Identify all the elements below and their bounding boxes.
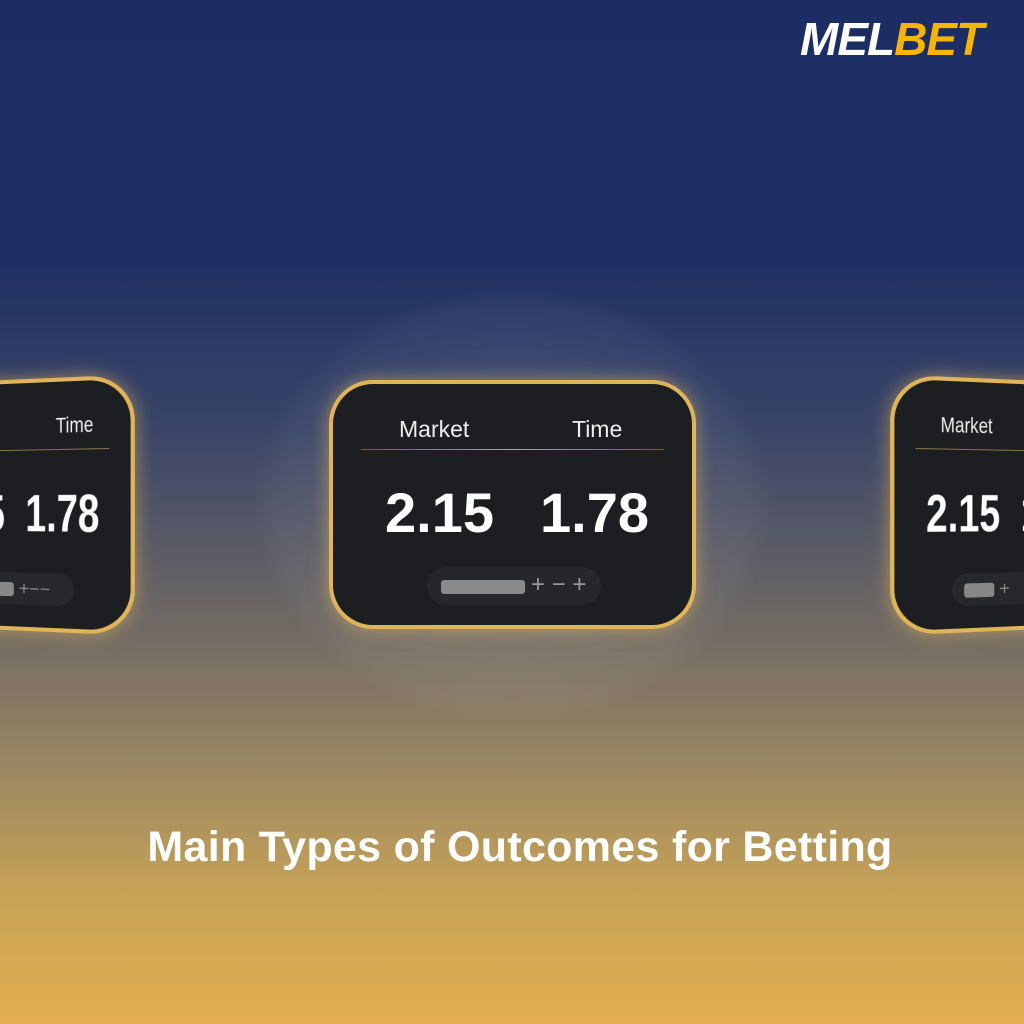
left card <box>0 374 135 636</box>
right card: + <box>999 578 1010 599</box>
center card: 1.78 <box>540 481 649 544</box>
left card: Time <box>56 413 93 438</box>
controls: + − + <box>531 571 586 598</box>
glow circle <box>255 290 770 720</box>
odds: 2.15 <box>385 481 494 544</box>
title: Main Types of Outcomes for Betting <box>147 823 893 871</box>
logo: MELBET <box>800 13 983 65</box>
center card: Time <box>572 416 622 442</box>
right card: Market <box>941 414 993 438</box>
left card: +−− <box>19 578 50 599</box>
center card <box>329 380 696 629</box>
controls <box>427 567 601 605</box>
header labels: Market <box>399 416 469 442</box>
right card <box>890 374 1024 636</box>
